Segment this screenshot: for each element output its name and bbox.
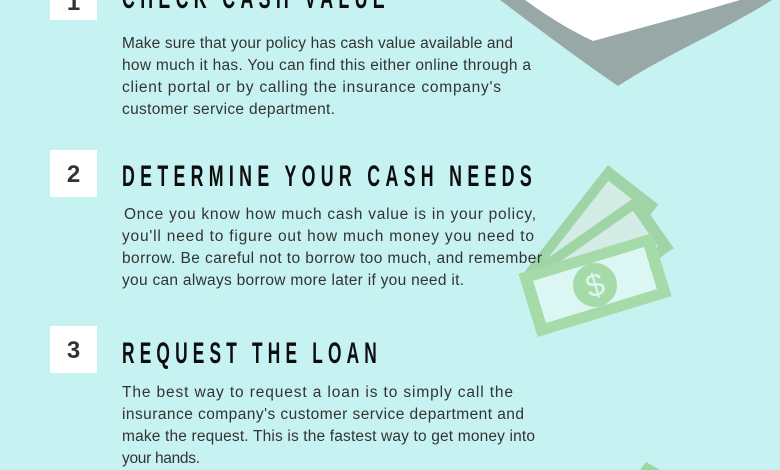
text 1: Make sure that your policy has cash value available and (122, 35, 513, 52)
icon: money bills (518, 165, 674, 337)
number box 3: 3 (67, 337, 80, 364)
heading 3: REQUEST THE LOAN (122, 337, 382, 370)
text 2: borrow. Be careful not to borrow too much, and remember (122, 250, 542, 267)
text 3: make the request. This is the fastest way to get money into (122, 428, 535, 445)
number box 2: 2 (67, 161, 80, 188)
text 1: customer service department. (122, 101, 335, 118)
step 2 (50, 150, 542, 289)
number box 3 (50, 326, 97, 373)
step 1 (50, 0, 531, 118)
text 2 (122, 206, 542, 289)
text 3: insurance company's customer service department and (122, 406, 524, 423)
text 3 (122, 384, 535, 467)
text 2: you can always borrow more later if you need it. (122, 272, 464, 289)
number box 2 (50, 150, 97, 197)
text 1 (122, 35, 531, 118)
icon: money bills: $ (581, 265, 609, 305)
icon: partial bill bottom (640, 462, 660, 470)
text 2: Once you know how much cash value is in your policy, (124, 206, 536, 223)
text 3: your hands. (122, 450, 200, 467)
icon: shield (500, 0, 772, 86)
text 3: The best way to request a loan is to simply call the (122, 384, 513, 401)
text 1: how much it has. You can find this either online through a (122, 57, 531, 74)
text 1: client portal or by calling the insurance company's (122, 79, 501, 96)
number box 1 (50, 0, 97, 20)
text 2: you'll need to figure out how much money you need to (122, 228, 534, 245)
step 3 (50, 326, 535, 467)
